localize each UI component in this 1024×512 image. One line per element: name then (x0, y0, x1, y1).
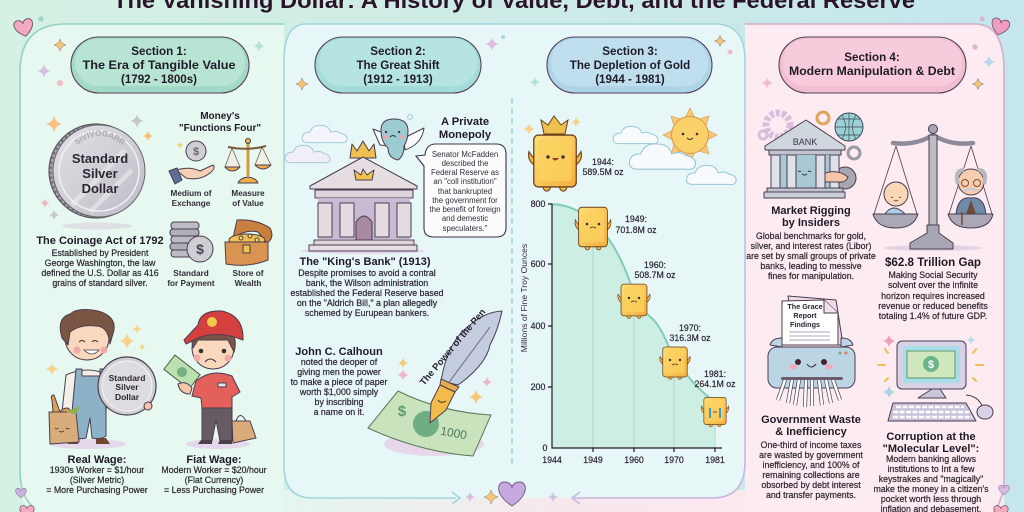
chart: millions of fine troy ounces line and area: 1944 (542, 455, 562, 465)
text: government waste and inefficiency: are wasted by government (759, 450, 863, 460)
illustration: power of the pen quill and bill: $ (398, 403, 407, 420)
callout: mcfadden speech bubble: Federal Reserve as (431, 168, 499, 177)
chart: millions of fine troy ounces line and area: 400 (531, 321, 545, 331)
text: market rigging by insiders: banks, leading to messive (760, 261, 862, 271)
panel: section 2 and 3 background (284, 24, 745, 504)
text: king's bank 1913: The "King's Bank" (1913) (299, 256, 431, 268)
label: 1970 value: 1970: (679, 323, 701, 333)
panel: section 1 era of tangible value (19, 23, 284, 512)
panel: section 4 modern manipulation and debt (745, 24, 1004, 512)
section 1 heading pill (71, 37, 249, 93)
label: 1981 value (694, 369, 736, 389)
text: coinage act of 1792: defined the U.S. Dollar as 416 (41, 268, 159, 278)
icon: bank with gears and globe (759, 112, 863, 198)
icon: balance scale with baby and old man (873, 124, 993, 251)
text: fiat wage: Fiat Wage: (186, 454, 242, 466)
icon: crying gold bar 1981 (701, 397, 729, 427)
callout: mcfadden speech bubble: the government for (432, 196, 498, 205)
text: government waste and inefficiency: & Inefficiency (775, 426, 848, 438)
label: medium of exchange (171, 189, 212, 208)
illustration: fiat wage worker with paper bill (164, 311, 256, 449)
section 1 heading pill: Section 1: (131, 45, 187, 58)
label: 1949 value (615, 214, 657, 235)
panel: section 2 great shift (285, 37, 506, 456)
section 2 heading pill: Section 2: (370, 45, 426, 58)
text: a private monepoly heading: Monepoly (439, 129, 492, 141)
section 2 heading pill (315, 37, 481, 93)
icon: standard silver dollar coin (40, 114, 153, 230)
text: real wage: (Silver Metric) (70, 475, 124, 485)
text: 62.8 trillion gap: Making Social Security (889, 270, 978, 280)
icon: king's bank building with crown (301, 141, 425, 254)
text: corruption at the molecular level: "Molecular Level": (883, 443, 979, 455)
callout: mcfadden speech bubble: speculaters." (443, 224, 488, 233)
text: government waste and inefficiency: and transfer payments. (766, 490, 856, 500)
section 3 heading pill (547, 37, 712, 93)
icon: standard silver dollar coin: Dollar (82, 181, 118, 196)
label: store of wealth (233, 269, 264, 288)
section 4 heading pill (779, 37, 966, 93)
text: john c. calhoun: noted the deoper of (301, 357, 378, 367)
text: 62.8 trillion gap: revenue or reduced benefits (878, 301, 988, 311)
text: market rigging by insiders: by Insiders (782, 217, 840, 229)
label: store of wealth: Wealth (235, 279, 261, 288)
text: king's bank 1913: on the "Aldrich Bill," a plan allegedly (297, 298, 438, 308)
section 2 heading pill: The Great Shift (356, 59, 440, 72)
text: john c. calhoun: John C. Calhoun (295, 346, 383, 358)
text: 62.8 trillion gap (878, 256, 988, 321)
icon: computer with dollar on screen (878, 335, 993, 421)
chart: millions of fine troy ounces line and area: 800 (531, 199, 545, 209)
text: coinage act of 1792: George Washington, the law (45, 258, 156, 268)
chart: millions of fine troy ounces line and area: 1949 (583, 455, 603, 465)
text: corruption at the molecular level: keystrakes and "magically" (879, 474, 983, 484)
icon: shredder with grace report (768, 296, 855, 407)
illustration: power of the pen quill and bill: 1000 (439, 424, 468, 442)
section 3 heading pill: (1944 - 1981) (595, 73, 665, 86)
label: 1960 value (634, 260, 676, 280)
chart: millions of fine troy ounces line and area (519, 199, 725, 465)
chart: millions of fine troy ounces line and area: 0 (543, 443, 548, 453)
chart: millions of fine troy ounces line and area: 1970 (664, 455, 684, 465)
label: measure of value: of Value (232, 199, 264, 208)
section 1 heading pill: (1792 - 1800s) (121, 73, 197, 86)
text: corruption at the molecular level: institutions to Int a few (887, 464, 975, 474)
text: market rigging by insiders: Market Rigging (771, 205, 851, 217)
text: corruption at the molecular level: Corruption at the (886, 431, 976, 443)
text: fiat wage: (Flat Currency) (185, 475, 243, 485)
illustration: real wage worker with silver dollar: Silver (115, 382, 139, 392)
text: market rigging by insiders: Global benchmarks for gold, (756, 231, 866, 241)
callout: mcfadden speech bubble: Senator McFadden (432, 150, 498, 159)
label: 1970 value (669, 323, 711, 343)
text: government waste and inefficiency (759, 414, 863, 500)
icon: crowned gold bar 1944 (524, 116, 581, 191)
text: john c. calhoun (291, 346, 387, 417)
icon: smiling sun and clouds (613, 108, 736, 185)
section 3 heading pill: The Depletion of Gold (570, 59, 690, 72)
text: real wage (46, 454, 148, 495)
label: 1949 value: 1949: (625, 214, 647, 224)
text: government waste and inefficiency: Government Waste (761, 414, 861, 426)
text: king's bank 1913: schemed by Eurupean bankers. (305, 308, 429, 318)
section 2 heading pill: (1912 - 1913) (363, 73, 433, 86)
icon: store of wealth treasure chest (225, 220, 272, 265)
section 3 heading pill: Section 3: (602, 45, 658, 58)
icon: measure of value scale (225, 138, 271, 183)
text: john c. calhoun: a name on it. (314, 407, 364, 417)
text: king's bank 1913: Despite promises to avoid a contral (298, 268, 436, 278)
text: john c. calhoun: by inscribing (315, 397, 364, 407)
text: functions four heading: "Functions Four" (179, 123, 261, 134)
text: government waste and inefficiency: obsorbed by debt interest (761, 480, 861, 490)
callout: mcfadden speech bubble: that bankrupted (438, 187, 492, 196)
icon: standard for payment coin stack (170, 222, 213, 262)
text: fiat wage: = Less Purchasing Power (164, 485, 264, 495)
text: corruption at the molecular level (873, 431, 989, 512)
text: king's bank 1913: established the Federal Reserve based (290, 288, 444, 298)
icon: computer with dollar on screen: $ (928, 359, 934, 371)
text: john c. calhoun: to make a piece of paper (291, 377, 387, 387)
icon: bank with gears and globe: BANK (793, 137, 817, 147)
text: coinage act of 1792 (36, 235, 164, 288)
icon: medium of exchange hand: $ (193, 146, 199, 158)
chart: millions of fine troy ounces line and area: 1960 (624, 455, 644, 465)
label: 1960 value: 508.7M oz (634, 270, 676, 280)
text: real wage: = More Purchasing Power (46, 485, 148, 495)
text: 62.8 trillion gap: horizon requires increased (881, 291, 985, 301)
chart: millions of fine troy ounces line and area: 600 (531, 259, 545, 269)
text: king's bank 1913: bank, the Wilson administration (306, 278, 428, 288)
text: real wage: Real Wage: (68, 454, 126, 466)
label: 1949 value: 701.8M oz (615, 225, 657, 235)
label: measure of value: Measure (231, 189, 265, 198)
label: 1970 value: 316.3M oz (669, 333, 711, 343)
text: corruption at the molecular level: Modern banking allows (886, 454, 977, 464)
label: medium of exchange: Exchange (172, 199, 211, 208)
text: government waste and inefficiency: inefficiency, and 100% of (762, 460, 860, 470)
icon: gold bar 1949 (575, 207, 611, 250)
label: standard for payment: Standard (173, 269, 209, 278)
icon: medium of exchange hand (169, 141, 214, 184)
chart: millions of fine troy ounces line and area: 200 (531, 382, 545, 392)
icon: shredder with grace report: The Grace (787, 302, 823, 311)
icon: sad winged mascot (373, 115, 424, 160)
text: king's bank 1913 (290, 256, 444, 318)
text: government waste and inefficiency: remaining collections are (762, 470, 860, 480)
icon: standard silver dollar coin: Silver (82, 166, 118, 181)
panel: section 3 depletion of gold (519, 37, 736, 465)
text: fiat wage (161, 454, 267, 495)
illustration: power of the pen quill and bill: The Power of the Pen (418, 307, 488, 388)
text: functions four heading: Money's (200, 111, 240, 122)
divider: sections 2 and 3 (511, 98, 513, 466)
callout: mcfadden speech bubble: described the (442, 159, 488, 168)
section 4 heading pill: Modern Manipulation & Debt (789, 65, 955, 78)
text: 62.8 trillion gap: $62.8 Trillion Gap (885, 256, 981, 269)
icon: gold bar 1960 (618, 284, 650, 318)
icon: standard silver dollar coin: Standard (72, 151, 128, 166)
section 4 heading pill: Section 4: (844, 51, 900, 64)
callout: mcfadden speech bubble: the benefit of foreign (429, 205, 501, 214)
text: 62.8 trillion gap: solvent over the infinite (888, 280, 978, 290)
icon: standard silver dollar coin: SIVIVOGARR (74, 130, 125, 145)
text: john c. calhoun: giving men the power (297, 367, 381, 377)
text: market rigging by insiders: are set by small groups of private (746, 251, 876, 261)
text: coinage act of 1792: The Coinage Act of 1792 (36, 235, 164, 247)
illustration: real wage worker with silver dollar: Standard (109, 373, 145, 383)
label: 1944 value: 589.5M oz (582, 167, 624, 177)
text: government waste and inefficiency: One-third of income taxes (761, 440, 862, 450)
illustration: power of the pen quill and bill (368, 307, 502, 456)
label: 1960 value: 1960: (644, 260, 666, 270)
label: measure of value (231, 189, 265, 208)
callout: mcfadden speech bubble: and demestic (442, 214, 488, 223)
illustration: real wage worker with silver dollar (46, 310, 156, 449)
icon: gold bar 1970 (660, 347, 690, 379)
text: corruption at the molecular level: make the money in a citizen's (873, 484, 989, 494)
text: john c. calhoun: worth $1,000 simply (299, 387, 379, 397)
label: store of wealth: Store of (233, 269, 264, 278)
chart: millions of fine troy ounces line and area: Millions of Fine Troy Ounces (519, 244, 529, 352)
callout: mcfadden speech bubble (416, 144, 506, 237)
text: coinage act of 1792: Established by President (52, 248, 149, 258)
label: standard for payment: for Payment (167, 279, 215, 288)
text: market rigging by insiders: fines for manipulation. (768, 271, 854, 281)
illustration: real wage worker with silver dollar: Dollar (115, 392, 140, 402)
text: fiat wage: Modern Worker = $20/hour (161, 465, 267, 475)
label: 1981 value: 264.1M oz (694, 379, 736, 389)
label: 1944 value (582, 157, 624, 177)
text: a private monepoly heading (439, 116, 492, 141)
icon: shredder with grace report: Report (793, 311, 817, 320)
callout: mcfadden speech bubble: an "coll institution" (433, 177, 497, 186)
text: market rigging by insiders: silver, and interest rates (Libor) (751, 241, 871, 251)
icon: shredder with grace report: Findings (790, 320, 820, 329)
text: market rigging by insiders (746, 205, 876, 281)
text: 62.8 trillion gap: totaling 1.4% of future GDP. (879, 311, 987, 321)
icon: standard for payment coin stack: $ (196, 241, 204, 257)
chart: millions of fine troy ounces line and area: 1981 (705, 455, 725, 465)
text: functions four heading (179, 111, 261, 134)
label: medium of exchange: Medium of (171, 189, 212, 198)
label: 1944 value: 1944: (592, 157, 614, 167)
text: coinage act of 1792: grains of standard silver. (52, 278, 148, 288)
text: corruption at the molecular level: pocket worth less through (881, 494, 981, 504)
label: 1981 value: 1981: (704, 369, 726, 379)
text: real wage: 1930s Worker = $1/hour (50, 465, 144, 475)
icon: clouds (285, 125, 347, 163)
text: a private monepoly heading: A Private (441, 116, 489, 128)
label: standard for payment (167, 269, 215, 288)
section 1 heading pill: The Era of Tangible Value (82, 59, 236, 72)
